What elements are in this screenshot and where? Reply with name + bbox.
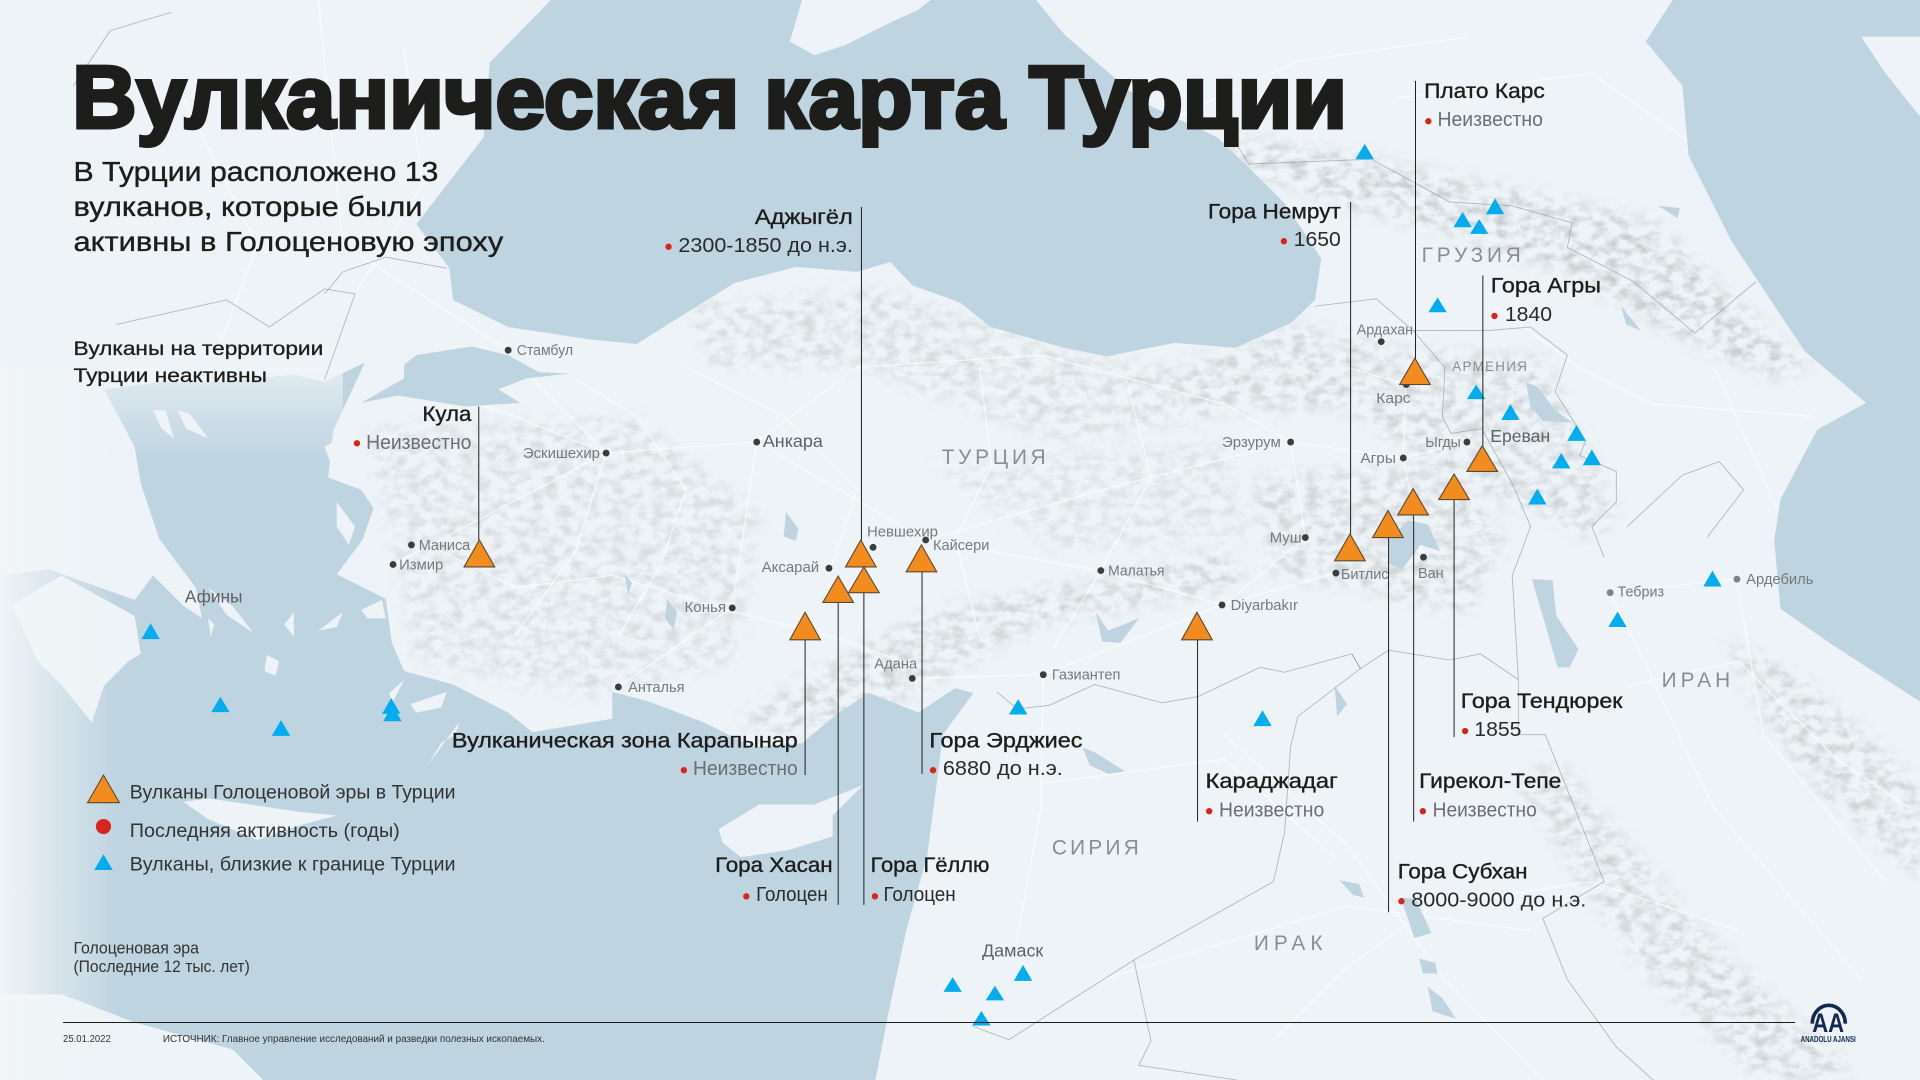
- volcano: Гора Тендюрек: 1855: [1474, 719, 1521, 741]
- country labels: ТУРЦИЯ: [942, 446, 1046, 469]
- city labels: Невшехир: [867, 524, 938, 540]
- city labels: Ардахан: [1357, 322, 1413, 338]
- caspian sea: [1646, 0, 1920, 702]
- volcano: Гора Эрджиес: [906, 545, 1083, 780]
- sea of marmara: [361, 347, 569, 407]
- subtitle: В Турции расположено 13: [73, 156, 438, 187]
- footer: date and source: ИСТОЧНИК: Главное управление исследований и разведки полезных ископаемых.: [163, 1034, 545, 1045]
- legend: Вулканы Голоценовой эры в Турции: [130, 781, 456, 803]
- city labels: Кайсери: [933, 538, 989, 554]
- volcano: Караджадаг: [1182, 612, 1338, 822]
- country labels: АРМЕНИЯ: [1452, 359, 1527, 374]
- subtitle: вулканов, которые были: [73, 191, 422, 222]
- cyprus: [719, 785, 863, 857]
- left edge fade: [0, 367, 116, 1080]
- volcano: Вулканическая зона Карапынар: Неизвестно: [693, 758, 798, 780]
- city labels: Стамбул: [517, 343, 573, 359]
- subtitle: [73, 156, 504, 257]
- note: holocene era: (Последние 12 тыс. лет): [73, 957, 250, 976]
- volcano: Гора Тендюрек: [1439, 474, 1623, 741]
- city labels: [185, 322, 1814, 960]
- volcano: Караджадаг: Неизвестно: [1219, 800, 1324, 822]
- city labels: Аксарай: [762, 560, 819, 576]
- city labels: Diyarbakır: [1231, 598, 1298, 614]
- city labels: Ардебиль: [1746, 572, 1814, 588]
- volcano: Гора Эрджиес: 6880 до н.э.: [943, 758, 1063, 780]
- volcano: Гора Немрут: [1208, 200, 1365, 561]
- note: inactive volcanoes: Вулканы на территории: [73, 338, 323, 360]
- volcano: Аджыгёл: [665, 205, 876, 567]
- greek land and islands: [12, 410, 459, 840]
- footer: date and source: 25.01.2022: [63, 1034, 111, 1045]
- blue triangles: volcanoes near the border: [141, 144, 1722, 1026]
- volcano: Кула: [354, 402, 495, 567]
- city labels: Эрзурум: [1222, 435, 1281, 451]
- volcano: Гора Субхан: [1373, 511, 1586, 912]
- volcano: Гора Эрджиес: Гора Эрджиес: [929, 729, 1083, 753]
- volcano: Кула: Неизвестно: [366, 432, 471, 454]
- volcano: Гирекол-Тепе: Гирекол-Тепе: [1419, 769, 1561, 793]
- city labels: Тебриз: [1618, 584, 1664, 600]
- city labels: Газиантеп: [1052, 668, 1120, 684]
- city labels: Дамаск: [982, 940, 1044, 960]
- volcano: Гора Хасан: Гора Хасан: [715, 853, 833, 877]
- volcano: Гора Гёллю: Голоцен: [883, 884, 956, 906]
- volcano: Караджадаг: Караджадаг: [1206, 769, 1338, 793]
- volcano: Гора Агры: 1840: [1505, 304, 1552, 326]
- note: holocene era: [73, 938, 250, 976]
- volcano: Гора Субхан: 8000-9000 до н.э.: [1411, 890, 1586, 912]
- city labels: Битлис: [1341, 567, 1389, 583]
- note: holocene era: Голоценовая эра: [73, 938, 200, 957]
- city labels: Анкара: [763, 431, 823, 451]
- country labels: [942, 244, 1730, 955]
- title: Вулканическая карта Турции: [72, 47, 1347, 146]
- city labels: Анталья: [628, 680, 684, 696]
- volcano: Вулканическая зона Карапынар: [452, 612, 820, 780]
- city labels: Конья: [684, 600, 726, 616]
- volcano: Аджыгёл: 2300-1850 до н.э.: [678, 235, 853, 257]
- volcano: Плато Карс: Плато Карс: [1424, 79, 1545, 103]
- volcano: Гора Гёллю: [849, 567, 989, 906]
- city labels: Маниса: [419, 538, 471, 554]
- city labels: Ереван: [1490, 426, 1550, 446]
- volcano: Плато Карс: Неизвестно: [1438, 109, 1543, 131]
- volcano: Гора Хасан: [715, 576, 853, 906]
- logo: Anadolu Ajansi: AA: [1812, 1008, 1844, 1038]
- north aegean fade: [104, 367, 343, 459]
- legend: [88, 775, 456, 876]
- volcano: Гора Немрут: 1650: [1294, 229, 1341, 251]
- volcano: Гора Немрут: Гора Немрут: [1208, 200, 1341, 224]
- volcano: Кула: Кула: [422, 402, 472, 426]
- subtitle: активны в Голоценовую эпоху: [73, 226, 504, 257]
- city labels: Агры: [1360, 451, 1396, 467]
- volcano: Гора Агры: [1467, 274, 1601, 471]
- city labels: Адана: [874, 657, 918, 673]
- crimea: [790, 0, 931, 55]
- city labels: Измир: [399, 557, 443, 573]
- logo: Anadolu Ajansi: ANADOLU AJANSI: [1801, 1034, 1856, 1044]
- city labels: Малатья: [1108, 564, 1164, 580]
- black sea: [416, 0, 1321, 356]
- lakes: [624, 206, 1680, 1019]
- volcano: Аджыгёл: Аджыгёл: [755, 205, 853, 229]
- note: inactive volcanoes: Турции неактивны: [73, 365, 267, 387]
- city labels: Карс: [1376, 391, 1411, 407]
- city labels: Муш: [1270, 530, 1302, 546]
- note: inactive volcanoes: [73, 338, 323, 387]
- volcano: Гирекол-Тепе: Неизвестно: [1433, 800, 1537, 822]
- volcano: Гора Тендюрек: Гора Тендюрек: [1461, 689, 1623, 713]
- mediterranean and aegean sea: [0, 362, 973, 1080]
- volcano: Гора Агры: Гора Агры: [1491, 274, 1601, 298]
- footer rule: [63, 1021, 1795, 1023]
- country labels: ИРАК: [1254, 932, 1322, 955]
- city labels: Ван: [1418, 566, 1444, 582]
- logo: Anadolu Ajansi: [1801, 1005, 1856, 1044]
- volcano: Вулканическая зона Карапынар: Вулканическая зона Карапынар: [452, 729, 798, 753]
- volcano: Плато Карс: [1400, 79, 1545, 384]
- country labels: ИРАН: [1662, 669, 1730, 692]
- legend: Последняя активность (годы): [130, 820, 400, 842]
- kara-bogaz land: [1861, 37, 1920, 116]
- country labels: СИРИЯ: [1052, 837, 1139, 860]
- city labels: Афины: [185, 586, 242, 606]
- volcano: Гирекол-Тепе: [1398, 489, 1561, 822]
- city labels: Ыгды: [1425, 435, 1461, 451]
- volcano: Гора Субхан: Гора Субхан: [1398, 860, 1528, 884]
- volcano: Гора Хасан: Голоцен: [756, 884, 828, 906]
- country labels: ГРУЗИЯ: [1422, 244, 1521, 267]
- city labels: Эскишехир: [523, 446, 600, 462]
- legend: Вулканы, близкие к границе Турции: [130, 854, 456, 876]
- volcano: Гора Гёллю: Гора Гёллю: [871, 853, 989, 877]
